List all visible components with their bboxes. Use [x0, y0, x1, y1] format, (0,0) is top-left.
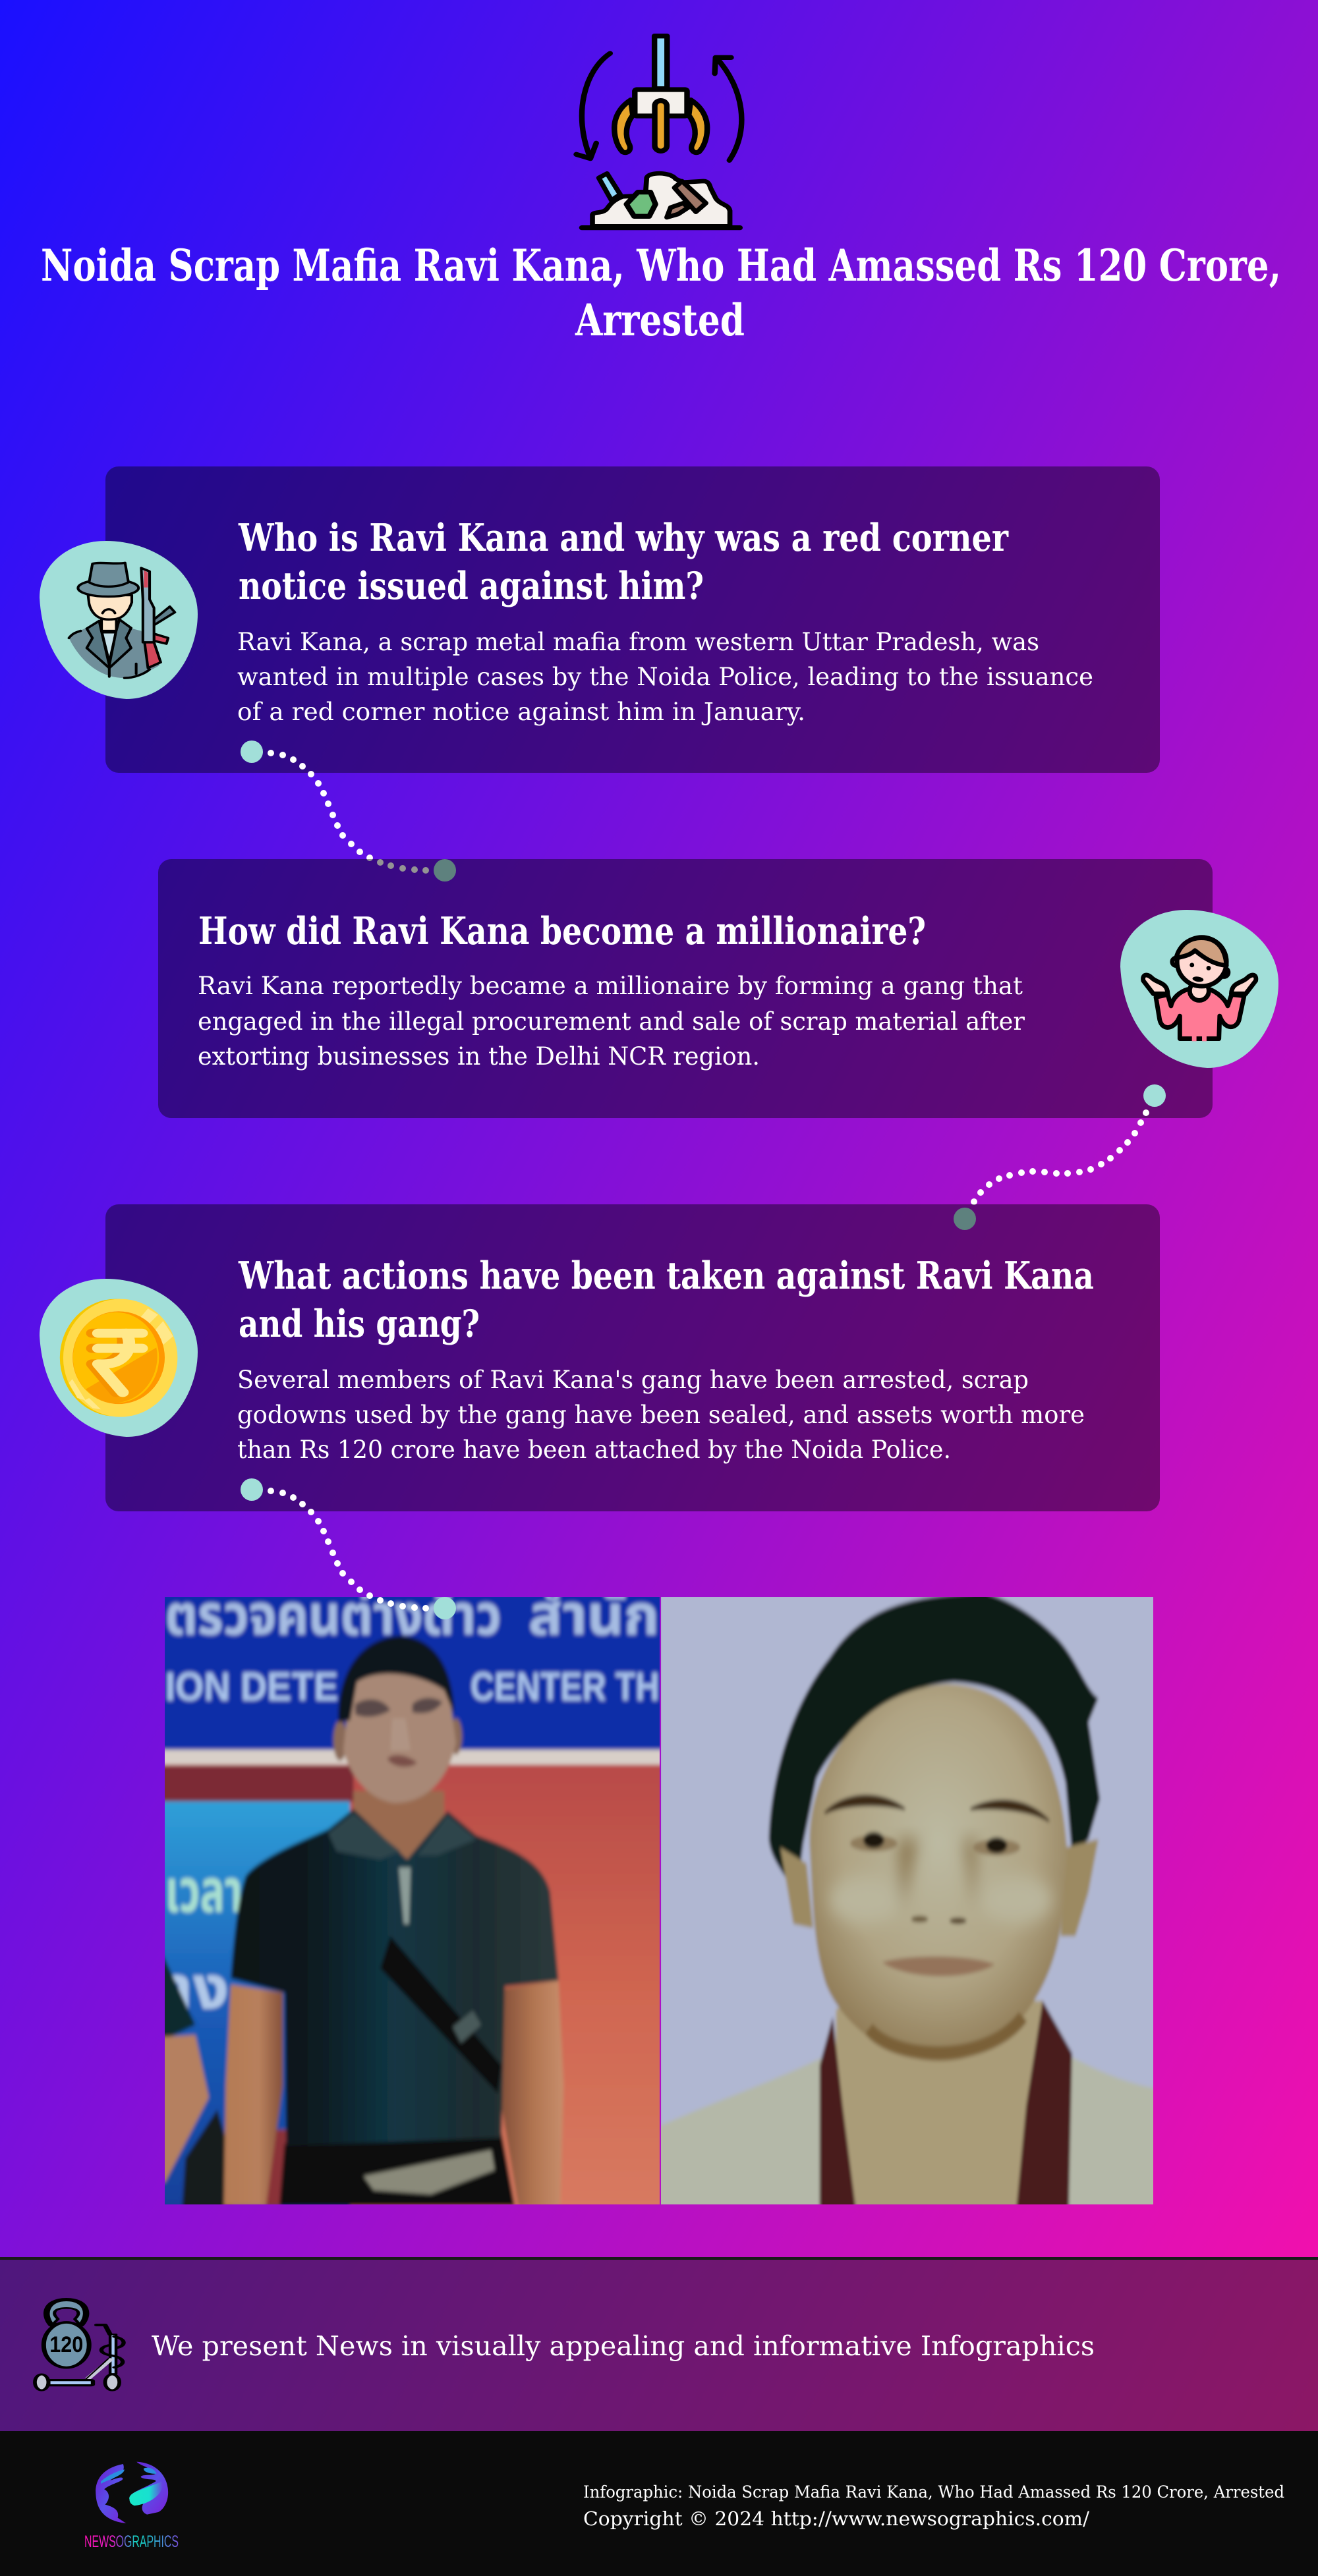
icon: scrap claw crane [577, 36, 741, 228]
photo: Ravi Kana at immigration centre: เวลา [165, 1848, 243, 1940]
heading: who is Ravi Kana: Who is Ravi Kana and why was a red corner [238, 516, 1009, 560]
panel: who is Ravi Kana [105, 466, 1160, 773]
photo: woman portrait [656, 1593, 1157, 2208]
photo: Ravi Kana at immigration centre: CENTER TH [471, 1664, 660, 1709]
icon: shrugging person in teal blob [1120, 910, 1278, 1068]
photo: Ravi Kana at immigration centre: ตรวจคนต่างด้าว [165, 1575, 501, 1660]
text block: millionaire [198, 972, 1025, 1071]
heading: who is Ravi Kana [238, 516, 1009, 608]
text block: who is Ravi Kana: of a red corner notice against him in January. [237, 698, 805, 726]
icon: gangster in teal blob [40, 541, 198, 699]
heading: who is Ravi Kana: notice issued against him? [239, 564, 704, 608]
text block: actions taken: godowns used by the gang have been sealed, and assets worth more [237, 1401, 1085, 1429]
photo: Ravi Kana at immigration centre: าง [165, 1945, 229, 2036]
photo: Ravi Kana at immigration centre: สำนัก [529, 1575, 660, 1660]
text block: millionaire: engaged in the illegal procurement and sale of scrap material after [198, 1007, 1025, 1036]
heading: millionaire: How did Ravi Kana become a millionaire? [198, 909, 926, 953]
heading: actions taken: and his gang? [239, 1302, 480, 1346]
icon: rupee coin in teal blob [40, 1279, 198, 1437]
text block: who is Ravi Kana [237, 628, 1093, 726]
photo: Ravi Kana at immigration centre: ION DETE [165, 1664, 338, 1709]
text block: who is Ravi Kana: wanted in multiple cases by the Noida Police, leading to the issuance [237, 663, 1093, 691]
icon: 120 kettlebell on scooter [35, 2301, 124, 2390]
logo: newsographics: NEWSOGRAPHICS [84, 2533, 179, 2551]
text block: banner tagline: We present News in visually appealing and informative Infographics [152, 2330, 1095, 2362]
title [41, 240, 1281, 346]
panel: how did he become a millionaire [158, 859, 1213, 1118]
text block: who is Ravi Kana: Ravi Kana, a scrap metal mafia from western Uttar Pradesh, was [237, 628, 1039, 656]
text block: actions taken: Several members of Ravi Kana's gang have been arrested, scrap [237, 1366, 1029, 1394]
text block: actions taken [237, 1366, 1085, 1464]
text block: actions taken: than Rs 120 crore have been attached by the Noida Police. [237, 1436, 951, 1464]
footer [0, 2431, 1318, 2576]
text block: millionaire: Ravi Kana reportedly became a millionaire by forming a gang that [198, 972, 1023, 1000]
connector: dotted path one [241, 741, 456, 882]
text block: footer credits: Infographic: Noida Scrap Mafia Ravi Kana, Who Had Amassed Rs 120 Crore, Arrested [583, 2482, 1284, 2502]
photo: Ravi Kana at immigration centre [162, 1575, 663, 2210]
heading: actions taken: What actions have been taken against Ravi Kana [238, 1254, 1094, 1298]
text block: footer credits [583, 2482, 1284, 2530]
text block: footer credits: Copyright © 2024 http://www.newsographics.com/ [583, 2507, 1089, 2530]
logo: newsographics [84, 2462, 179, 2551]
text block: millionaire: extorting businesses in the Delhi NCR region. [198, 1042, 760, 1071]
heading: actions taken [238, 1254, 1094, 1346]
connector: dotted path three [241, 1478, 456, 1619]
icon: 120 kettlebell on scooter: 120 [49, 2332, 83, 2357]
panel: actions taken [105, 1204, 1160, 1511]
connector: dotted path two [954, 1084, 1166, 1230]
banner [0, 2257, 1318, 2431]
title: Arrested [575, 294, 745, 346]
